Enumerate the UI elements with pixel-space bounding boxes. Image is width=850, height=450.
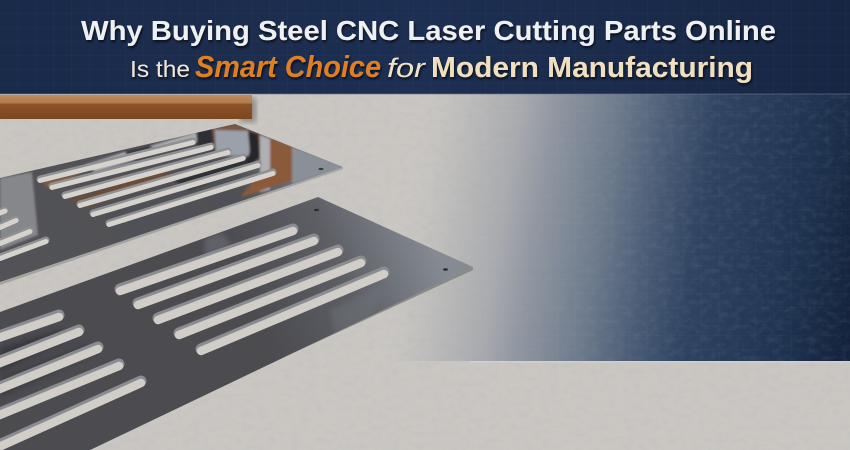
title line 2: is the: Is the [130, 56, 190, 82]
blue gradient panel [0, 94, 850, 362]
wooden board [0, 95, 256, 122]
front steel plate [0, 197, 473, 450]
title [81, 15, 776, 84]
faint grid over panel [480, 94, 850, 361]
front plate slots, left group [0, 315, 141, 450]
header band [0, 0, 850, 94]
title line 2: smart choice: Smart Choice [195, 49, 381, 84]
plate reflections [0, 232, 385, 398]
title line 2: for: for [387, 53, 426, 83]
title line 1: Why Buying Steel CNC Laser Cutting Parts Online [81, 15, 776, 46]
rear plate slots [0, 141, 273, 258]
plate reflections [0, 124, 343, 250]
title line 2: modern manufacturing: Modern Manufacturing [431, 52, 753, 84]
rear plate screw hole [318, 168, 324, 170]
rear steel plate [0, 124, 343, 285]
front plate slots, right group [120, 229, 384, 351]
front plate screw holes [314, 209, 448, 271]
